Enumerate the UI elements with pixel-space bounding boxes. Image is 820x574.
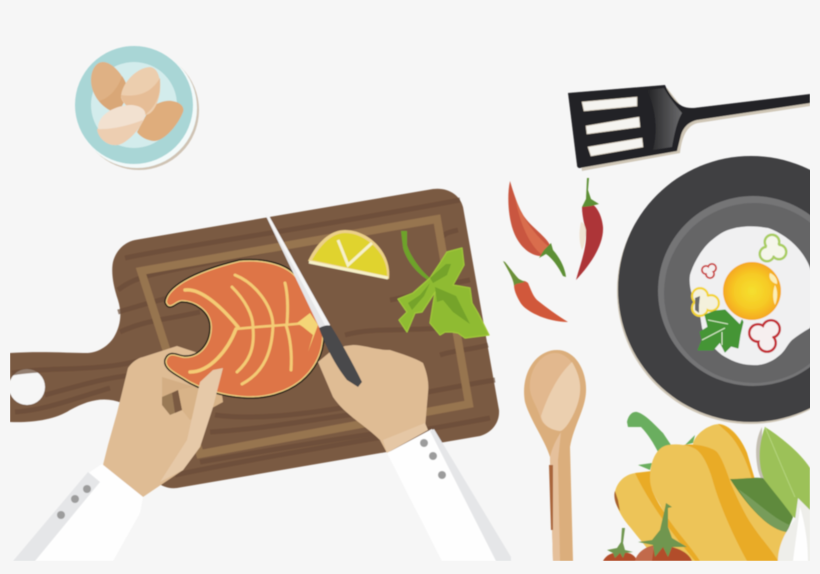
pepper ring: yellow <box>691 287 720 317</box>
spatula slots <box>582 97 643 156</box>
sleeve buttons <box>57 485 91 519</box>
egg one <box>91 62 127 112</box>
knife <box>264 212 362 387</box>
yellow peppers <box>614 412 790 561</box>
red chili one <box>508 181 566 277</box>
right hand <box>318 345 428 453</box>
parsley garnish <box>698 310 743 352</box>
spatula <box>568 85 810 171</box>
pepper ring: small red <box>701 263 717 279</box>
red chili three <box>503 261 568 322</box>
frying pan <box>617 156 820 424</box>
parsley <box>398 231 489 338</box>
lemon wedge <box>308 230 389 279</box>
egg white <box>690 226 820 365</box>
left sleeve <box>13 464 143 561</box>
back pepper <box>693 424 790 561</box>
right sleeve <box>387 429 511 561</box>
middle pepper <box>683 444 778 561</box>
garlic <box>778 498 810 561</box>
left hand <box>103 346 223 497</box>
pepper ring: green <box>758 234 788 262</box>
pepper stem <box>627 412 671 452</box>
left thumb <box>160 368 223 482</box>
wooden spoon <box>524 350 586 561</box>
plate of eggs <box>75 46 199 170</box>
basil leaves <box>730 427 810 532</box>
sleeve buttons <box>420 439 446 479</box>
red chili two <box>576 178 603 280</box>
cutting board <box>9 189 499 488</box>
tomato stems <box>607 528 633 558</box>
pepper ring: large red <box>748 319 781 353</box>
egg yolk <box>723 262 781 320</box>
salmon steak <box>167 262 322 396</box>
board groove <box>141 219 469 454</box>
tomatoes <box>603 503 692 561</box>
salmon bones <box>185 275 305 384</box>
egg two <box>121 67 183 141</box>
wood grain <box>12 200 495 475</box>
egg three <box>97 105 145 145</box>
left pepper <box>615 472 700 561</box>
